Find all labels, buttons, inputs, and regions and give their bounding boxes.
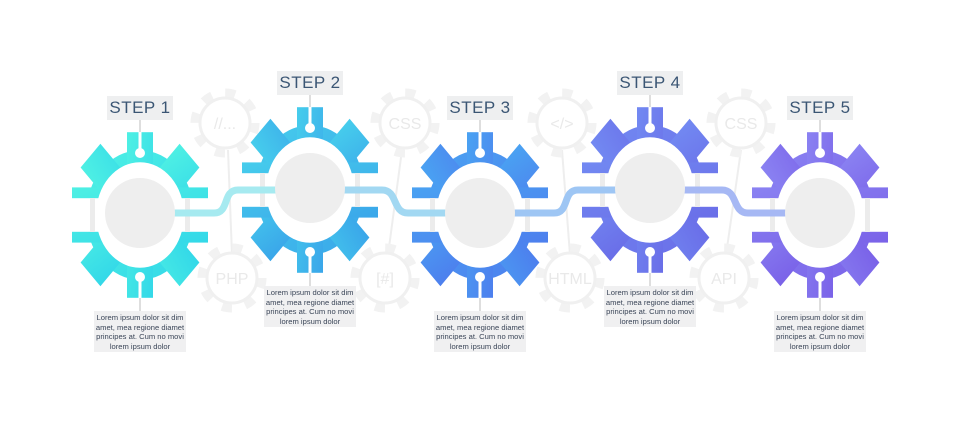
inner circles xyxy=(105,153,855,248)
step 3 label: STEP 3 xyxy=(449,98,511,117)
background gears: [#] xyxy=(376,271,394,288)
step 1 text: Lorem ipsum dolor sit dim amet, mea regione diamet principes at. Cum no movi lorem ipsum dolor xyxy=(96,313,184,351)
gear 5 xyxy=(750,132,890,298)
label lines xyxy=(140,95,820,312)
step 5 label: STEP 5 xyxy=(789,98,851,117)
background gears: CSS xyxy=(725,116,757,133)
background gears: </> xyxy=(550,116,574,133)
step 4 text: Lorem ipsum dolor sit dim amet, mea regione diamet principes at. Cum no movi lorem ipsum dolor xyxy=(606,288,694,326)
gear 2 xyxy=(240,107,380,273)
gear 3 xyxy=(410,132,550,298)
background gears: HTML xyxy=(548,271,592,288)
connectors xyxy=(170,190,790,213)
step 1 label: STEP 1 xyxy=(109,98,171,117)
background gears: CSS xyxy=(389,116,421,133)
background gears: API xyxy=(711,271,737,288)
step 4 label: STEP 4 xyxy=(619,73,681,92)
gear 4 xyxy=(580,107,720,273)
step 5 text: Lorem ipsum dolor sit dim amet, mea regione diamet principes at. Cum no movi lorem ipsum dolor xyxy=(776,313,864,351)
step 2 label: STEP 2 xyxy=(279,73,341,92)
step 2 text: Lorem ipsum dolor sit dim amet, mea regione diamet principes at. Cum no movi lorem ipsum dolor xyxy=(266,288,354,326)
background gears xyxy=(195,93,771,308)
step 3 text: Lorem ipsum dolor sit dim amet, mea regione diamet principes at. Cum no movi lorem ipsum dolor xyxy=(436,313,524,351)
background gears: //... xyxy=(214,116,236,133)
gear 1 xyxy=(70,132,210,298)
background gears: PHP xyxy=(216,271,248,288)
